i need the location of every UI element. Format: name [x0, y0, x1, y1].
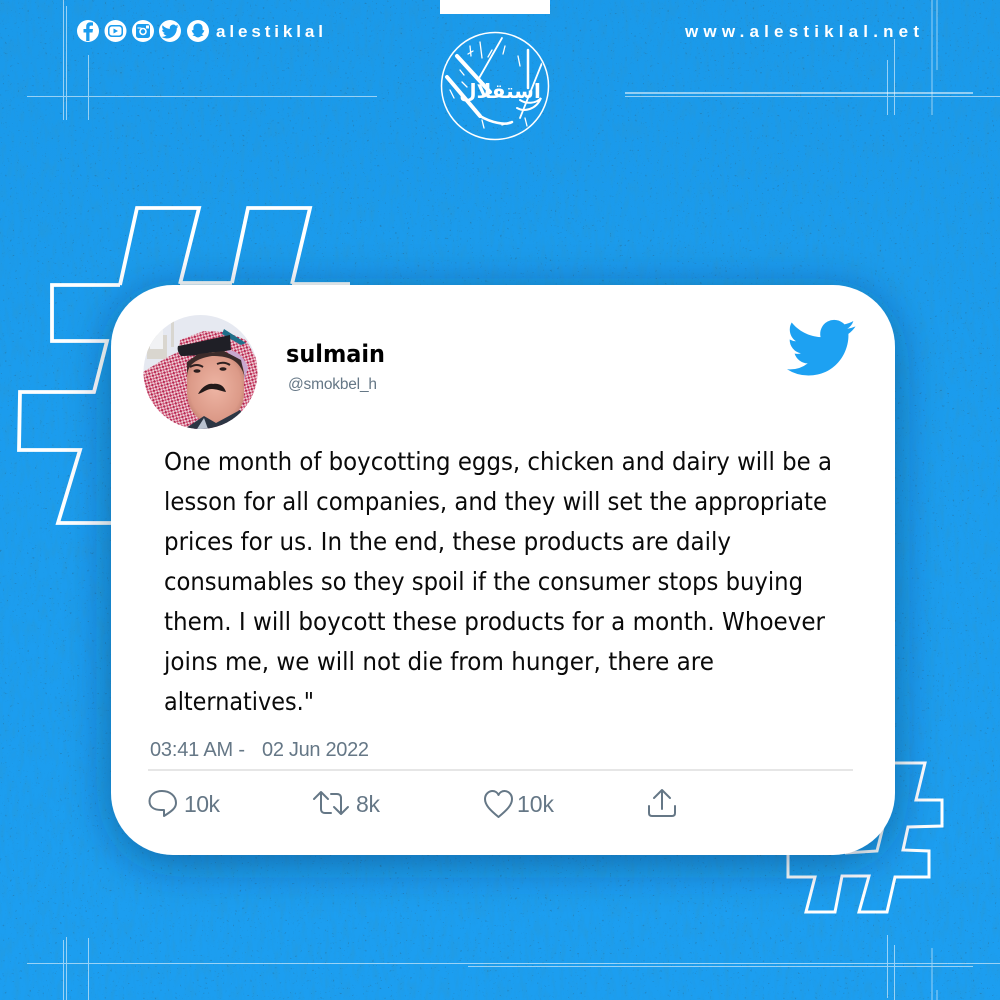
stat: likes: [485, 791, 554, 817]
stat: replies: 10k: [184, 791, 220, 817]
timestamp: 03:41 AM -: [150, 739, 245, 761]
timestamp: [150, 739, 369, 761]
avatar photo: [143, 315, 259, 430]
top white tab: [440, 0, 550, 14]
brand name: alestiklal: [216, 22, 323, 41]
agal: [178, 335, 231, 356]
logo: round calligraphy emblem: استقلال: [459, 79, 541, 103]
tweet body text: them. I will boycott these products for a month. Whoever: [164, 607, 826, 636]
panel: tweet card: [111, 285, 895, 855]
decorative crop lines: top left: [27, 0, 377, 120]
tweet body text: lesson for all companies, and they will set the appropriate: [164, 487, 827, 516]
author name: sulmain: [286, 340, 385, 368]
decorative crop lines: top right: [625, 0, 1000, 115]
stat: retweets: 8k: [356, 791, 380, 817]
icon: twitter: [159, 20, 181, 42]
tweet body text: joins me, we will not die from hunger, there are: [163, 647, 714, 676]
stat: likes: 10k: [517, 791, 554, 817]
timestamp: 02 Jun 2022: [262, 739, 369, 761]
tweet body text: consumables so they spoil if the consumer stops buying: [164, 567, 803, 596]
divider: [148, 769, 853, 771]
decorative crop lines: bottom right: [468, 935, 1000, 1000]
decorative crop lines: bottom left: [27, 937, 620, 1000]
tweet body text: prices for us. In the end, these products are daily: [164, 527, 731, 556]
icon: instagram: [132, 20, 154, 42]
author handle: @smokbel_h: [288, 376, 377, 393]
hashtag outline: left: [19, 208, 350, 523]
website url: www.alestiklal.net: [684, 22, 919, 41]
icon: snapchat: [187, 20, 209, 42]
tweet body text: alternatives.": [164, 687, 314, 716]
headdress: [143, 331, 259, 429]
icon: youtube: [104, 20, 126, 42]
icon: facebook: [77, 20, 99, 42]
social icons row: [77, 20, 209, 42]
tweet body text: [163, 447, 832, 716]
logo: round calligraphy emblem: [442, 32, 548, 140]
hashtag outline: right: [788, 763, 942, 912]
icon: twitter bird: [787, 320, 855, 375]
tweet body text: One month of boycotting eggs, chicken and dairy will be a: [164, 447, 832, 476]
stat: retweets: [314, 791, 380, 817]
face: [187, 352, 244, 423]
icon: share: [649, 790, 675, 816]
stat: replies: [150, 791, 220, 817]
